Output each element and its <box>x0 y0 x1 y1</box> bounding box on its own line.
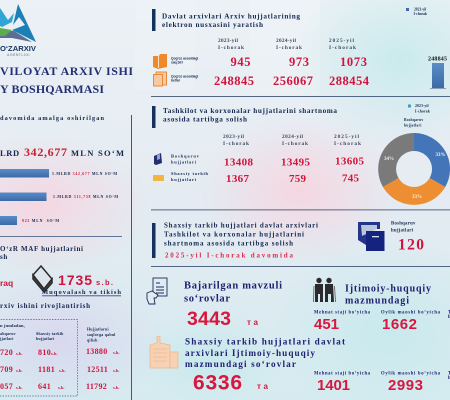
heading: MAF documents: O‘zR MAF hujjatlarini <box>0 245 83 253</box>
donut chart <box>378 104 450 205</box>
logo <box>0 4 36 57</box>
stat: personnel social requests: 6336 <box>193 372 242 394</box>
section: contract documents: Boshqaruv <box>171 154 200 158</box>
section: contract documents: Shaxsiy tarkib <box>171 171 208 176</box>
section: contract documents <box>152 106 364 185</box>
donut chart: hujjatlari <box>404 124 422 128</box>
section: electronic copies: 2025-yil <box>329 38 355 44</box>
section: contract documents: hujjatlari <box>171 160 197 164</box>
logo: AGENTLIGI <box>7 53 30 57</box>
clipped text at right edge <box>448 310 450 381</box>
stat: social legal heading <box>345 284 431 306</box>
icon: building <box>150 336 178 368</box>
dotted table box: s.b. <box>16 368 23 373</box>
section: contract documents: hujjatlari <box>171 177 197 182</box>
column: storage intake: saqlovga qabul <box>87 332 116 337</box>
title: Y BOSHQARMASI <box>0 82 104 96</box>
bar chart: budget <box>0 169 118 225</box>
section: electronic copies: 2023-yil <box>218 38 239 44</box>
subtitle: budget: davomida amalga oshirilgan <box>0 115 104 122</box>
dotted table box: n jumladan, <box>0 323 25 328</box>
bar chart: budget: 922 MLN SO‘M <box>22 218 59 223</box>
section: personnel documents <box>152 222 318 260</box>
dotted table box: s.b. <box>51 351 58 356</box>
stat: varaq: raq <box>0 278 13 288</box>
column: storage intake: Hujjatlarni <box>87 326 109 332</box>
section: contract documents: asosida tartibga solish <box>163 116 247 124</box>
section: electronic copies: 248845 <box>214 74 254 88</box>
divider <box>151 208 450 211</box>
divider <box>151 265 450 268</box>
stat: personnel social requests: mazmundagi so‘rovlar <box>185 359 296 369</box>
section: contract documents: 13605 <box>335 156 364 168</box>
stat: binding: Muqovalash va tikish <box>42 289 121 296</box>
stat: personnel social requests: arxivlari Ijtimoiy-huquqiy <box>185 348 315 358</box>
section: electronic copies: Qog‘oz asosidagi <box>171 56 198 60</box>
stat: management documents 120: hujjatlari <box>391 228 414 234</box>
bar chart: top right <box>406 8 447 89</box>
stat: management documents 120: Boshqaruv <box>391 222 416 226</box>
stat: management documents 120: 120 <box>398 236 424 254</box>
heading: MAF documents: sh <box>0 253 8 261</box>
icon: orange pages <box>154 72 166 86</box>
section: electronic copies <box>152 9 370 88</box>
bar chart: top right: I-chorak <box>414 12 427 16</box>
section: personnel documents: Shaxsiy tarkib hujjatlari davlat arxivlari <box>164 222 318 230</box>
section: contract documents: 2023-yil <box>223 134 245 140</box>
dotted table box: s.b. <box>58 385 65 390</box>
section: electronic copies: 2024-yil <box>276 38 297 44</box>
icon: navy folder <box>358 222 384 251</box>
stat row: first: Oylik maoshi bo‘yicha <box>381 310 441 316</box>
stat: social legal heading: Ijtimoiy-huquqiy <box>345 284 431 294</box>
stat: thematic requests <box>184 280 282 330</box>
dotted table box: jjatlari <box>0 336 14 341</box>
section: electronic copies: Qog‘oz asosidagi <box>171 74 198 78</box>
divider <box>0 235 122 238</box>
budget total <box>0 145 124 159</box>
dotted table box: ahqaruv <box>0 331 16 336</box>
stat row: first <box>314 310 441 333</box>
logo: O‘ZARXIV <box>0 44 36 53</box>
section: personnel documents: Tashkilot va korxonalar hujjatlarini <box>164 230 304 238</box>
section: contract documents: 2025-yil <box>334 134 360 140</box>
icon: orange folders <box>153 54 167 69</box>
vertical separator <box>131 115 132 400</box>
donut chart: I-chorak <box>415 110 431 114</box>
section: contract documents: I-chorak <box>334 141 361 147</box>
stat row: second: 1401 <box>317 377 350 394</box>
column: storage intake: s.b. <box>113 368 120 373</box>
section: contract documents: Tashkilot va korxonalar hujjatlarini shartnoma <box>163 107 337 115</box>
section: contract documents: 745 <box>342 172 360 184</box>
icon: elderly people <box>314 278 336 302</box>
heading: archive development: rxiv ishini rivojlantirish <box>0 302 90 310</box>
donut chart: 33% <box>412 195 422 200</box>
dotted table box <box>0 320 78 396</box>
section: electronic copies: 1073 <box>340 55 367 69</box>
bar chart: budget: 1.MLRD 342,677 MLN SO‘M <box>52 171 117 176</box>
section: electronic copies: Davlat arxivlari Arxiv hujjatlarining <box>162 12 300 20</box>
stat: personnel social requests: Shaxsiy tarkib hujjatlari davlat <box>185 336 346 346</box>
dotted table box: 057 <box>0 382 13 391</box>
section: electronic copies: 973 <box>289 55 309 69</box>
column: storage intake: 13880 <box>86 347 108 356</box>
stat: thematic requests: 3443 <box>187 308 231 330</box>
dotted table box: 810 <box>38 348 51 357</box>
bar chart: budget: 1.MLRD 311,758 MLN SO‘M <box>53 194 118 199</box>
section: electronic copies: 288454 <box>329 74 370 88</box>
title <box>0 64 133 96</box>
section: electronic copies: elektron nusxasini yaratish <box>162 21 263 29</box>
donut chart: 33% <box>436 153 446 158</box>
stat: thematic requests: so‘rovlar <box>184 294 230 304</box>
section: electronic copies: betlar <box>171 78 181 82</box>
heading: MAF documents <box>0 245 83 261</box>
dotted table box: 709 <box>0 365 13 374</box>
section: electronic copies: saq.birl <box>171 60 183 64</box>
bar chart: top right: 248845 <box>428 56 447 62</box>
section: contract documents: 759 <box>289 173 306 185</box>
stat: personnel social requests <box>185 336 346 394</box>
column: storage intake <box>86 326 120 391</box>
bar chart: top right: 2023-yil <box>414 8 426 12</box>
icon: book <box>33 266 52 292</box>
section: contract documents: 1367 <box>226 173 250 185</box>
icon: document in hand <box>147 278 167 304</box>
donut chart: Boshqaruv <box>404 118 424 122</box>
title: VILOYAT ARXIV ISHI <box>0 64 133 78</box>
column: storage intake: 11792 <box>86 382 107 391</box>
stat: binding: 1735 <box>58 272 92 288</box>
donut chart: 34% <box>384 157 394 162</box>
dotted table box: 1181 <box>38 365 55 374</box>
section: contract documents: 13408 <box>224 156 254 168</box>
dotted table box: s.b. <box>16 351 23 356</box>
stat row: second: 2993 <box>388 377 423 394</box>
icon: yellow folder <box>153 175 164 181</box>
section: electronic copies: I-chorak <box>276 45 302 51</box>
section: personnel documents: 2025-yil I-chorak davomida <box>165 252 294 260</box>
section: contract documents: 13495 <box>281 156 310 168</box>
section: contract documents: 2024-yil <box>282 134 304 140</box>
budget total: 342,677 <box>24 145 67 159</box>
section: electronic copies: I-chorak <box>218 45 244 51</box>
dotted table box: s.b. <box>59 368 66 373</box>
column: storage intake: s.b. <box>113 350 120 355</box>
column: storage intake: s.b. <box>113 385 120 390</box>
stat: binding: s.b. <box>96 278 113 287</box>
section: contract documents: I-chorak <box>282 141 308 147</box>
stat row: first: 451 <box>314 316 339 333</box>
section: electronic copies: I-chorak <box>329 45 356 51</box>
stat row: second: Mehnat staji bo‘yicha <box>314 370 371 376</box>
stat: management documents 120 <box>391 222 424 254</box>
stat row: second <box>314 370 441 394</box>
stat: social legal heading: mazmundagi <box>345 296 409 306</box>
stat: thematic requests: та <box>247 318 259 327</box>
column: storage intake: qilish <box>87 338 98 342</box>
section: contract documents: I-chorak <box>223 141 249 147</box>
donut chart: 2023-yil <box>415 104 429 108</box>
column: storage intake: 12511 <box>87 365 108 374</box>
section: personnel documents: shartnoma asosida tartibga solish <box>164 240 293 248</box>
divider <box>151 95 450 98</box>
stat row: second: Oylik maoshi bo‘yicha <box>381 370 441 376</box>
dotted table box: hujjatlari <box>36 336 55 341</box>
budget total: MLN SO‘M <box>71 148 124 158</box>
dotted table box: 641 <box>38 382 51 391</box>
section: electronic copies: 945 <box>230 55 250 69</box>
section: electronic copies: 256067 <box>273 74 313 88</box>
stat row: first: 1662 <box>382 316 417 333</box>
stat row: first: Mehnat staji bo‘yicha <box>314 310 371 316</box>
stat: thematic requests: Bajarilgan mavzuli <box>184 280 282 292</box>
budget total: LRD <box>0 148 20 158</box>
icon: blue document <box>154 153 162 165</box>
dotted table box: 720 <box>0 348 13 357</box>
stat: personnel social requests: та <box>257 382 269 391</box>
stat: binding <box>42 272 121 296</box>
dotted table box: Shaxsiy tarkib <box>36 331 64 336</box>
dotted table box: s.b. <box>16 385 23 390</box>
